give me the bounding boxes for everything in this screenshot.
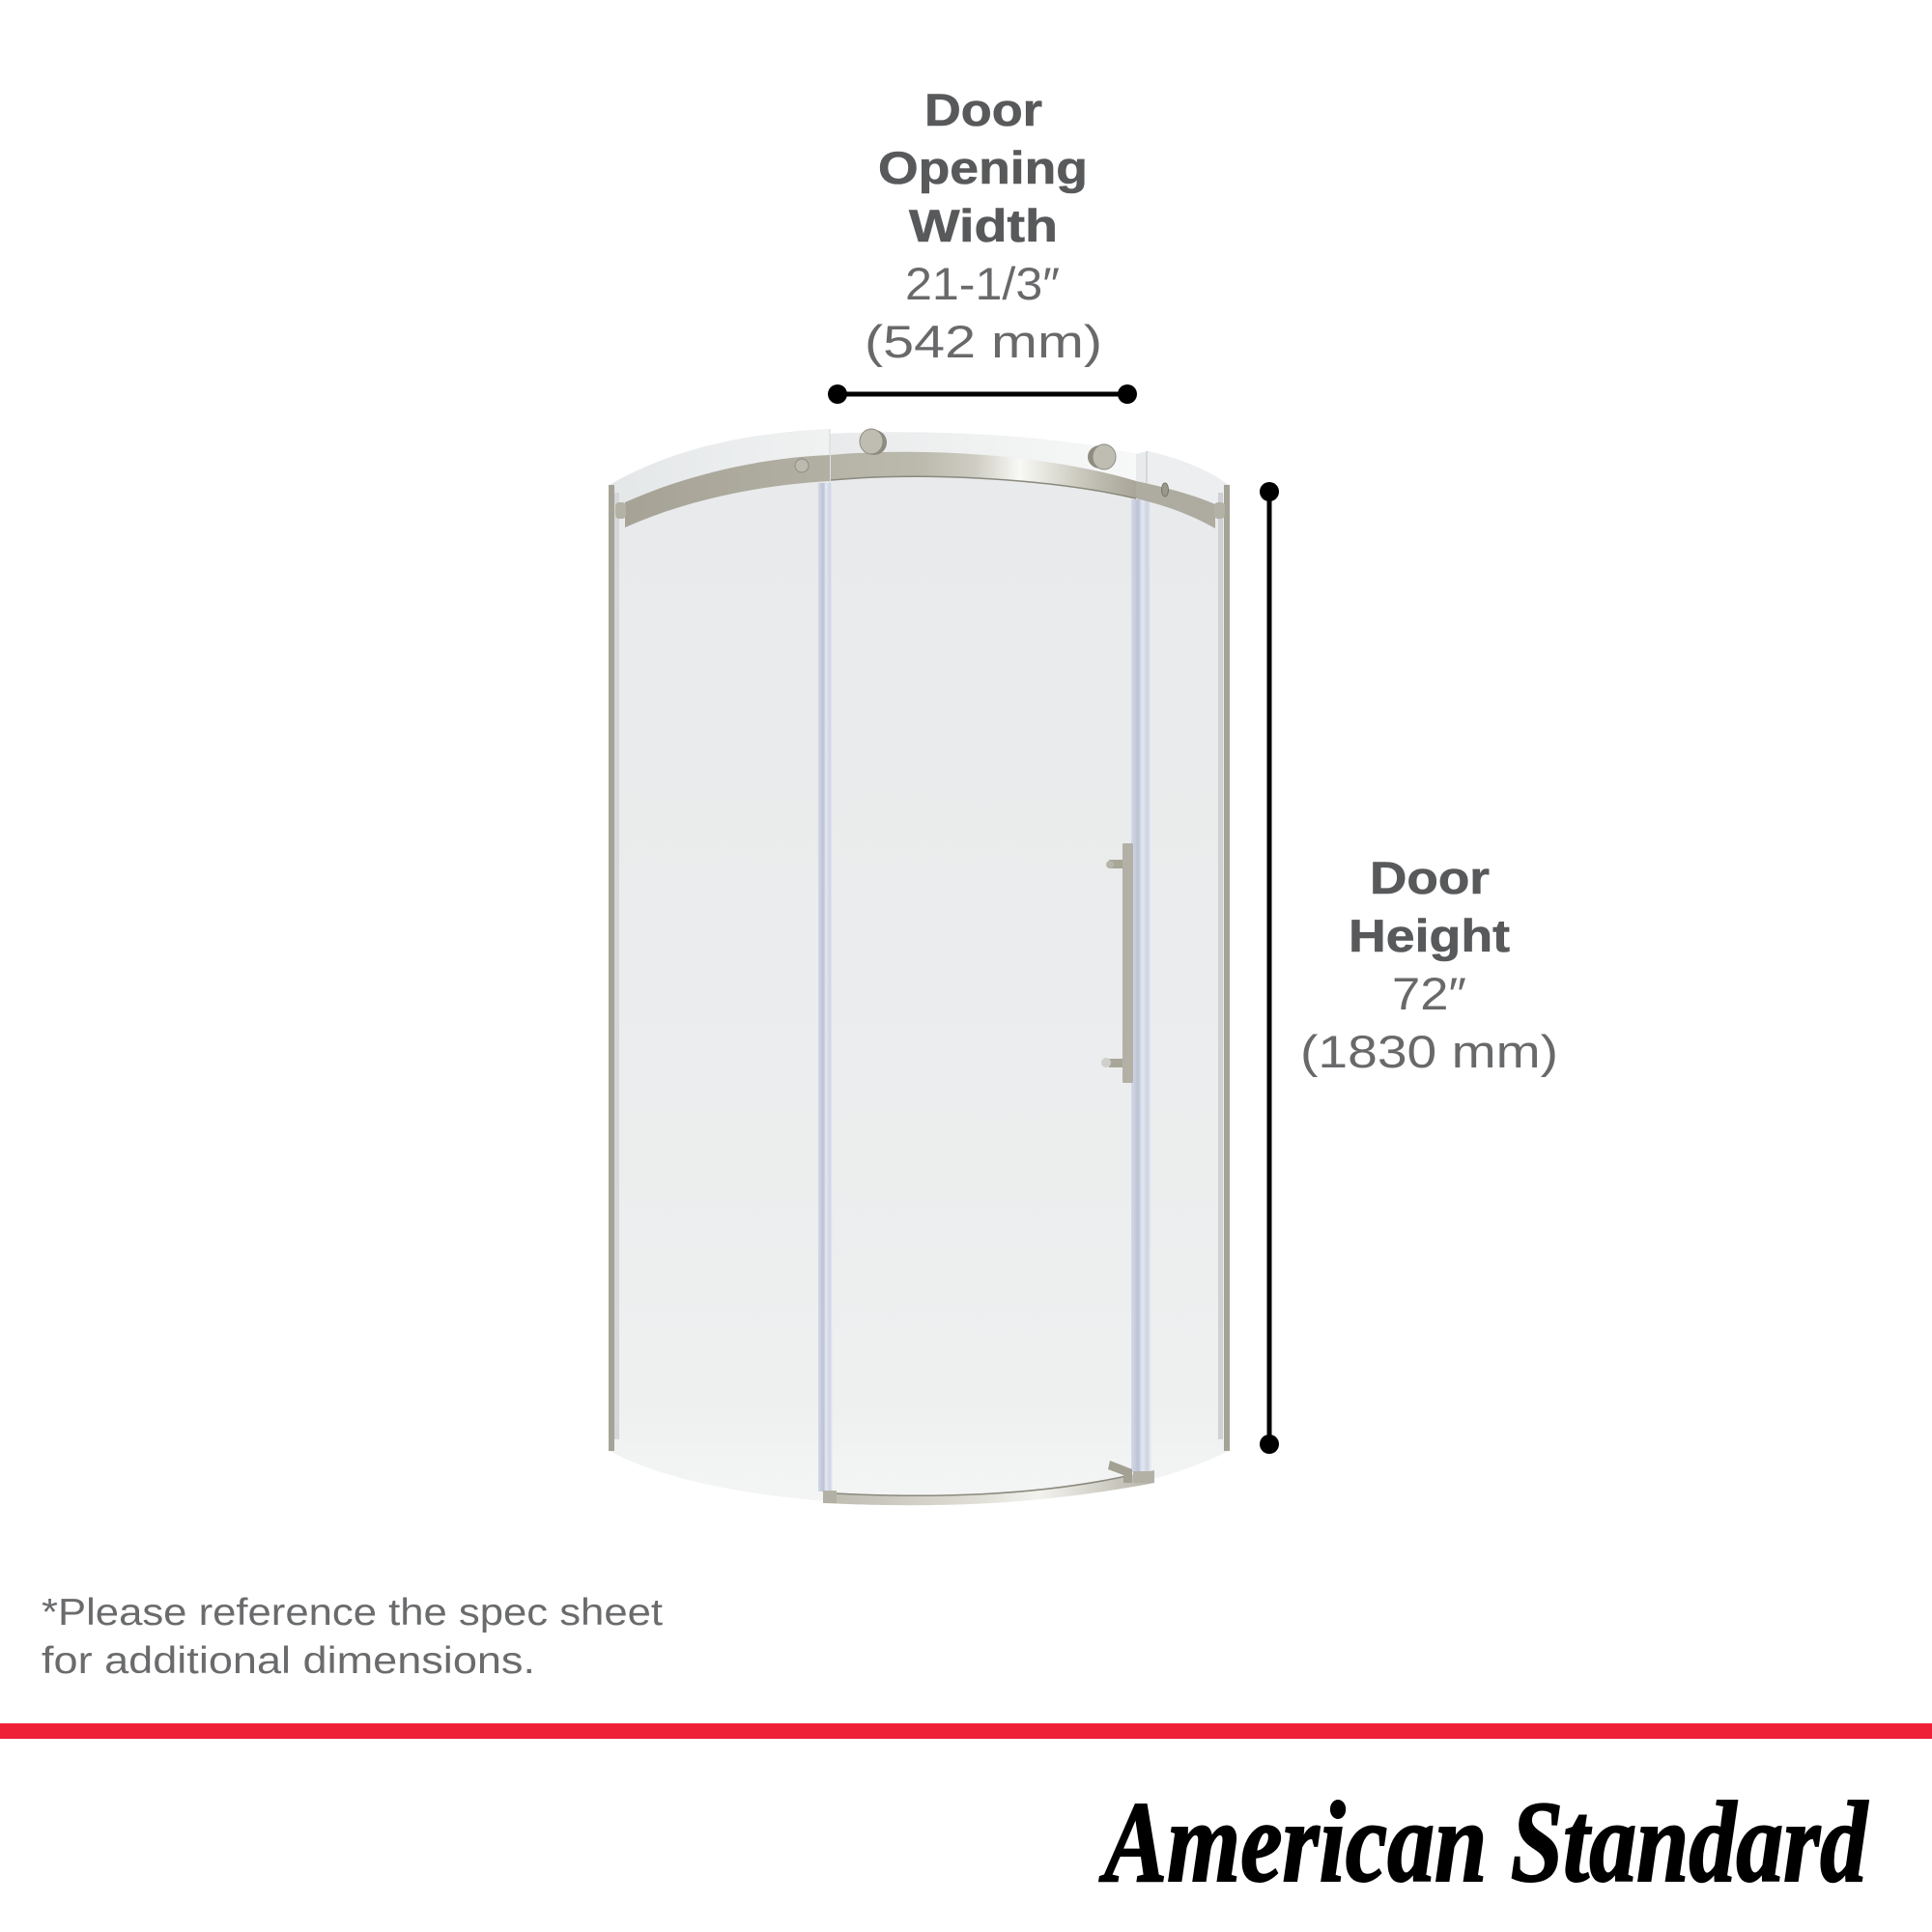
frame: right post: [1218, 485, 1230, 1451]
footnote: for additional dimensions.: [42, 1640, 535, 1682]
shower door illustration: [609, 429, 1230, 1505]
label: door opening width: (542 mm): [865, 316, 1102, 367]
label: door opening width: 21-1/3″: [905, 258, 1060, 309]
glass: body: [610, 429, 1229, 1505]
dimension line: door height: [1260, 482, 1279, 1454]
red divider bar: [0, 1723, 1932, 1739]
label: door opening width: Opening: [878, 142, 1088, 193]
footnote: *Please reference the spec sheet: [42, 1592, 663, 1634]
rail: top left: [625, 455, 830, 527]
footnote: [42, 1592, 663, 1682]
label: door opening width: Door: [924, 84, 1042, 135]
door handle: [1101, 843, 1133, 1083]
label: door height: (1830 mm): [1300, 1026, 1558, 1077]
bracket: right: [1214, 502, 1225, 519]
seal: left vertical: [818, 483, 833, 1492]
label: door height: Height: [1349, 910, 1510, 961]
label: door height: [1300, 852, 1558, 1077]
roller: right: [1088, 444, 1116, 469]
label: door height: Door: [1370, 852, 1490, 903]
glass: top right panel: [1148, 451, 1229, 512]
fastener: top left: [795, 459, 809, 472]
frame: left post: [609, 485, 619, 1451]
rail: top centre: [831, 452, 1136, 498]
bracket: left: [615, 502, 626, 519]
label: door opening width: Width: [909, 200, 1058, 251]
bottom rail: [823, 1461, 1154, 1505]
roller: left: [860, 429, 887, 455]
rail: top right: [1136, 481, 1215, 528]
glass: top left panel: [610, 429, 830, 512]
glass: top centre panel: [831, 432, 1136, 481]
dimension line: door opening width: [828, 384, 1137, 404]
label: door height: 72″: [1392, 968, 1466, 1019]
fastener: top right: [1161, 483, 1169, 497]
seal: right vertical: [1131, 499, 1151, 1472]
label: door opening width: [865, 84, 1102, 367]
